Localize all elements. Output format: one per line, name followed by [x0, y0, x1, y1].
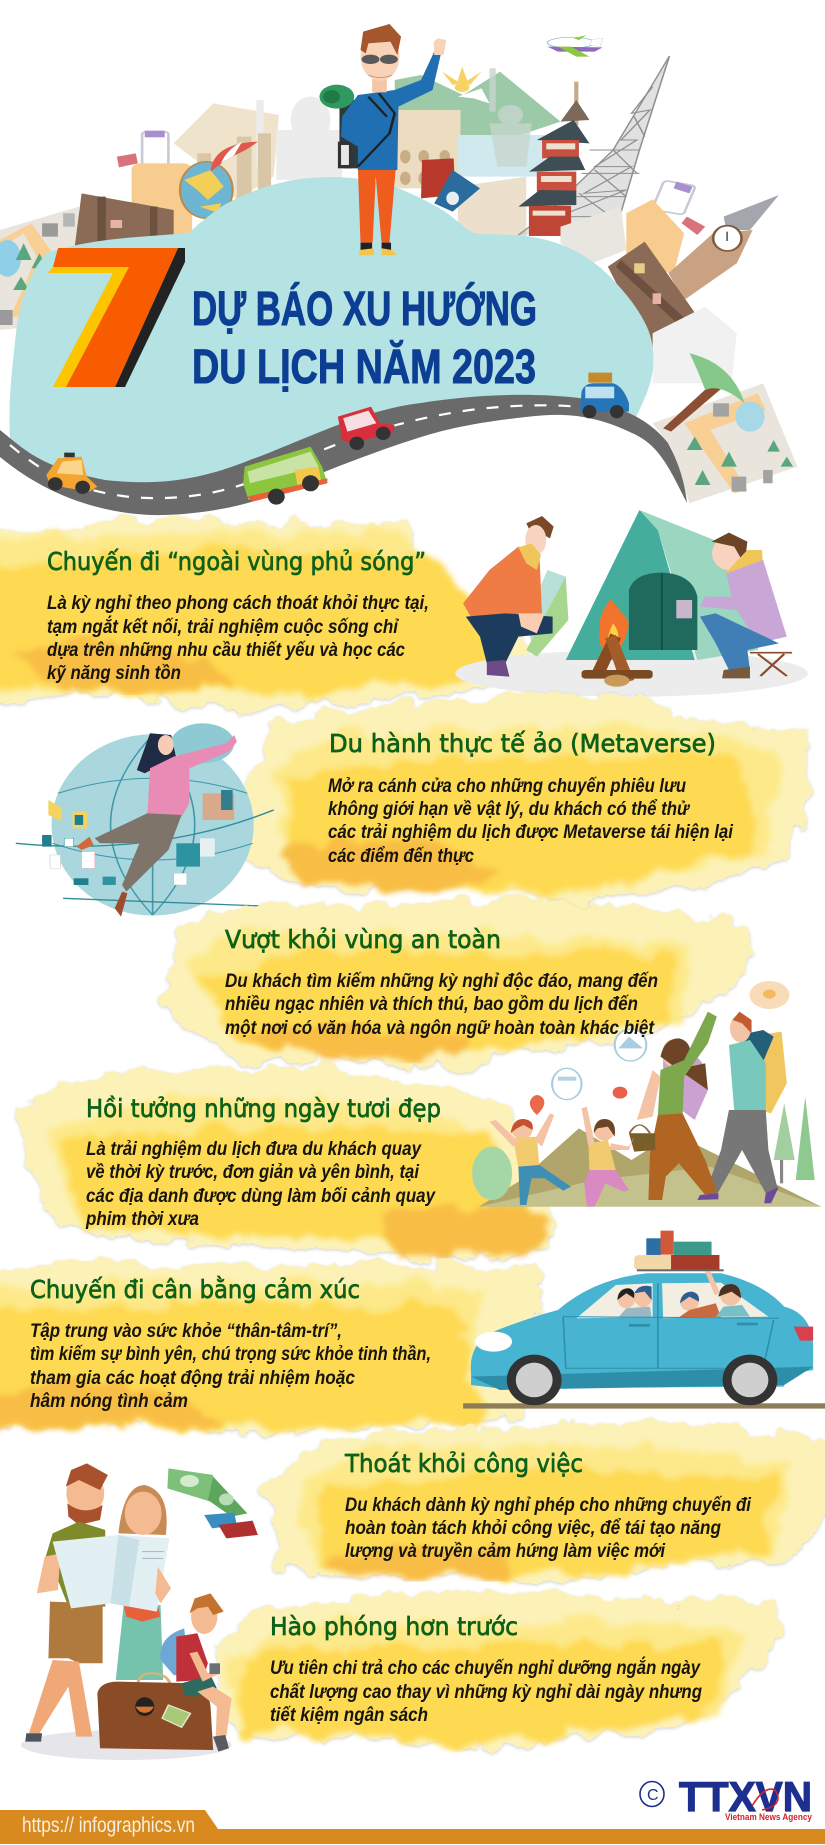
statue of liberty — [489, 68, 532, 167]
panel 5 text: hâm nóng tình cảm — [30, 1390, 188, 1412]
passports — [421, 158, 480, 212]
ground line — [463, 1403, 825, 1409]
teal cloud background — [9, 177, 653, 490]
umbrella — [211, 142, 258, 172]
orbit lines — [16, 810, 274, 906]
plant — [526, 570, 568, 657]
panel 3 text: Vượt khỏi vùng an toàn — [225, 925, 501, 954]
panel 6 text: hoàn toàn tách khỏi công việc, để tái tạo năng — [345, 1517, 721, 1539]
colosseum — [395, 110, 461, 188]
road — [0, 395, 687, 515]
panel 7 text: Ưu tiên chi trả cho các chuyến nghỉ dưỡng ngắn ngày — [270, 1656, 701, 1679]
icons — [530, 981, 789, 1115]
backpack — [319, 85, 368, 168]
legs — [358, 168, 396, 243]
TTXVN logo: Vietnam News Agency — [725, 1812, 812, 1822]
daughter — [582, 1107, 634, 1207]
panel 6 text: lượng và truyền cảm hứng làm việc mới — [345, 1540, 665, 1562]
panel 5 text — [30, 1275, 431, 1412]
header landmarks collage — [0, 56, 797, 503]
son — [489, 1113, 571, 1205]
passengers — [617, 1272, 750, 1317]
wheels — [507, 1355, 777, 1405]
illustration: metaverse globe — [16, 723, 274, 917]
panel 7 text: tiết kiệm ngân sách — [270, 1704, 428, 1726]
torso and arm — [341, 52, 441, 170]
snow cap — [458, 88, 489, 103]
panel 2 text: các trải nghiệm du lịch được Metaverse tái hiện lại — [328, 821, 734, 843]
mountains — [395, 72, 561, 167]
panel 1 text: Chuyến đi “ngoài vùng phủ sóng” — [47, 547, 426, 576]
panel 7 text: Hào phóng hơn trước — [270, 1612, 518, 1641]
copyright symbol — [640, 1782, 664, 1806]
panel 2 background — [232, 695, 812, 905]
panel 2 text: Du hành thực tế ảo (Metaverse) — [329, 729, 716, 758]
mother hand — [155, 1567, 171, 1603]
blue car — [580, 373, 629, 418]
title: DU LỊCH NĂM 2023 — [192, 340, 536, 394]
globe — [52, 723, 254, 916]
money — [167, 1468, 247, 1517]
boy — [160, 1593, 232, 1752]
mother — [637, 1012, 717, 1200]
campfire — [582, 599, 653, 687]
orange suitcase right — [626, 181, 705, 273]
brown suitcase right — [608, 242, 700, 350]
mother — [116, 1485, 167, 1680]
illustration: camping — [455, 510, 808, 697]
white buildings right — [561, 207, 626, 263]
orange suitcase left — [117, 131, 192, 235]
panel 7 background — [212, 1590, 780, 1748]
hills — [479, 1128, 821, 1207]
panel 4 text: các địa danh được dùng làm bối cảnh quay — [86, 1185, 436, 1207]
panel 6 text: Thoát khỏi công việc — [344, 1449, 583, 1478]
door lines and headlight — [475, 1283, 813, 1368]
panel 5 text: Tập trung vào sức khỏe “thân-tâm-trí”, — [30, 1320, 342, 1342]
suitcase — [97, 1673, 213, 1750]
stool — [750, 653, 792, 676]
panel 5 text: Chuyến đi cân bằng cảm xúc — [30, 1275, 360, 1304]
panel 1 text: dựa trên những nhu cầu thiết yếu và học các — [47, 639, 405, 661]
hand — [434, 38, 446, 55]
panel 1 text: kỹ năng sinh tồn — [47, 662, 181, 684]
illustration: hiking family — [472, 981, 821, 1207]
neck and head — [361, 24, 401, 92]
illustration: family with map — [21, 1463, 258, 1760]
panel 4 text: Là trải nghiệm du lịch đưa du khách quay — [86, 1138, 422, 1160]
panel 4 text: Hồi tưởng những ngày tươi đẹp — [86, 1094, 441, 1123]
ground shadow — [21, 1730, 232, 1760]
panel 1 text: Là kỳ nghỉ theo phong cách thoát khỏi thực tại, — [47, 592, 429, 614]
picnic basket — [629, 1125, 655, 1152]
beige building — [458, 177, 526, 238]
map — [53, 1535, 169, 1612]
bus — [243, 447, 327, 505]
woman — [676, 533, 787, 678]
panel 1 text — [47, 547, 429, 684]
floating windows — [42, 790, 234, 885]
globe — [180, 162, 233, 218]
panel 4 background — [10, 1065, 558, 1258]
footer bar — [0, 1810, 825, 1844]
water — [458, 135, 545, 177]
bush — [472, 1147, 512, 1200]
car body — [471, 1273, 813, 1388]
map left — [0, 207, 79, 330]
panel 3 text — [225, 925, 658, 1039]
panel 4 text: phim thời xưa — [85, 1208, 199, 1230]
trees — [774, 1097, 815, 1183]
big ben — [668, 195, 779, 300]
credit cards — [204, 1513, 258, 1538]
brown suitcase left — [75, 193, 174, 248]
copyright symbol: C — [647, 1787, 659, 1804]
panel 2 text: các điểm đến thực — [328, 845, 474, 867]
panel 3 text: một nơi có văn hóa và ngôn ngữ hoàn toàn khác biệt — [225, 1017, 655, 1039]
panel 6 background — [263, 1422, 825, 1585]
shoes — [359, 243, 397, 255]
panel 7 text — [270, 1612, 702, 1726]
illustration: blue car — [463, 1231, 825, 1409]
straps — [358, 93, 395, 167]
tent — [566, 510, 758, 660]
panel 4 text: về thời kỳ trước, đơn giản và yên bình, tại — [86, 1161, 419, 1183]
panel 3 text: nhiều ngạc nhiên và thích thú, bao gồm du lịch đến — [225, 993, 638, 1015]
TTXVN logo: TTXVN — [679, 1773, 812, 1820]
footer url: https:// infographics.vn — [22, 1814, 195, 1837]
taj mahal — [256, 97, 342, 180]
car lower trim — [471, 1367, 813, 1390]
father — [697, 1012, 787, 1203]
number 7 — [48, 248, 185, 387]
panel 1 text: tạm ngắt kết nối, trải nghiệm cuộc sống chỉ — [47, 615, 399, 638]
woman — [76, 733, 237, 917]
panel 7 text: chất lượng cao thay vì những kỳ nghỉ dài ngày nhưng — [270, 1681, 702, 1703]
panel 5 background — [0, 1260, 542, 1432]
panel 3 text: Du khách tìm kiếm những kỳ nghỉ độc đáo, mang đến — [225, 970, 658, 992]
taxi — [46, 453, 97, 494]
father — [25, 1463, 108, 1742]
sun rays — [442, 67, 482, 92]
panel 6 text — [344, 1449, 751, 1562]
panel 6 text: Du khách dành kỳ nghỉ phép cho những chuyến đi — [345, 1494, 751, 1516]
temple — [174, 103, 279, 200]
ground — [455, 650, 808, 697]
panel 1 background — [0, 518, 528, 712]
panel 2 text: không giới hạn về vật lý, du khách có thể thử — [328, 798, 691, 820]
eiffel tower — [518, 56, 669, 235]
title: DỰ BÁO XU HƯỚNG — [192, 281, 537, 336]
panel 5 text: tìm kiếm sự bình yên, chú trọng sức khỏe tinh thần, — [30, 1343, 431, 1365]
panel 3 background — [163, 900, 758, 1068]
red car — [338, 407, 395, 450]
panel 2 text: Mở ra cánh cửa cho những chuyến phiêu lưu — [328, 775, 686, 797]
sky plane — [547, 35, 603, 57]
title — [192, 281, 537, 394]
panel 5 text: tham gia các hoạt động trải nhiệm hoặc — [30, 1367, 355, 1389]
palm tree — [663, 353, 745, 432]
person traveller — [319, 24, 446, 255]
map right — [653, 383, 797, 503]
panel 2 text — [328, 729, 734, 867]
man — [463, 516, 554, 677]
panel 4 text — [85, 1094, 441, 1230]
pagoda — [518, 82, 589, 236]
windows — [576, 1283, 768, 1318]
temple columns — [197, 133, 271, 200]
faint city right — [653, 307, 737, 383]
roof luggage — [634, 1231, 724, 1271]
